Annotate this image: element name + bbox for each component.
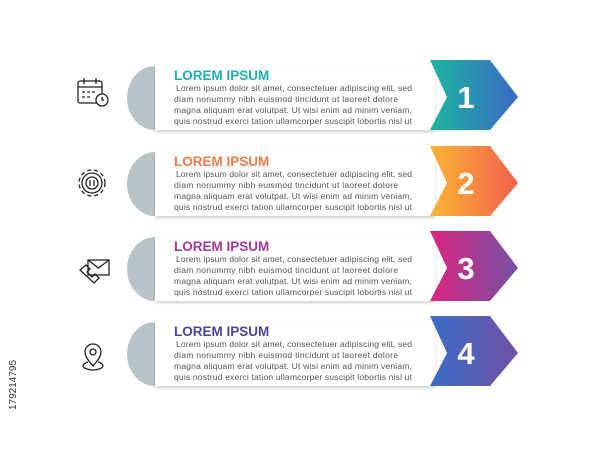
- number 2: 2: [457, 166, 475, 201]
- body 2: quis nostrud exerci tation ullamcorper suscipit lobortis nisl ut: [174, 202, 413, 212]
- body 4: diam nonummy nibh euismod tincidunt ut laoreet dolore: [174, 350, 398, 360]
- icon: location pin: [83, 344, 103, 370]
- row 1: [78, 60, 518, 130]
- body 1: diam nonummy nibh euismod tincidunt ut laoreet dolore: [174, 94, 398, 104]
- body 1: Lorem ipsum dolor sit amet, consectetuer adipiscing elit, sed: [176, 83, 412, 93]
- row 2: [79, 146, 518, 216]
- body 3: Lorem ipsum dolor sit amet, consectetuer adipiscing elit, sed: [176, 254, 412, 264]
- body 3: magna aliquam erat volutpat. Ut wisi enim ad minim veniam,: [174, 276, 412, 286]
- body 1: quis nostrud exerci tation ullamcorper suscipit lobortis nisl ut: [174, 116, 413, 126]
- number 4: 4: [457, 336, 475, 371]
- body 2: magna aliquam erat volutpat. Ut wisi enim ad minim veniam,: [174, 191, 412, 201]
- row 3: [80, 231, 518, 301]
- title 1: LOREM IPSUM: [174, 68, 269, 83]
- body 4: quis nostrud exerci tation ullamcorper suscipit lobortis nisl ut: [174, 372, 413, 382]
- icon: gear: [79, 170, 105, 196]
- half circle 3: [127, 237, 155, 301]
- row 4: [83, 316, 518, 386]
- arrow 4: [430, 316, 518, 386]
- body 3: quis nostrud exerci tation ullamcorper suscipit lobortis nisl ut: [174, 287, 413, 297]
- half circle 2: [127, 152, 155, 216]
- card 1: [155, 66, 435, 130]
- card 2: [155, 152, 435, 216]
- title 2: LOREM IPSUM: [174, 154, 269, 169]
- arrow 2: [430, 146, 518, 216]
- card 3: [155, 237, 435, 301]
- half circle 1: [127, 66, 155, 130]
- icon: calendar: [78, 78, 108, 106]
- watermark id: 179214795: [8, 360, 19, 410]
- body 2: Lorem ipsum dolor sit amet, consectetuer adipiscing elit, sed: [176, 169, 412, 179]
- body 4: Lorem ipsum dolor sit amet, consectetuer adipiscing elit, sed: [176, 339, 412, 349]
- body 3: diam nonummy nibh euismod tincidunt ut laoreet dolore: [174, 265, 398, 275]
- card 4: [155, 322, 435, 386]
- half circle 4: [127, 322, 155, 386]
- icon: envelope and phone: [80, 260, 109, 283]
- body 4: magna aliquam erat volutpat. Ut wisi enim ad minim veniam,: [174, 361, 412, 371]
- arrow 1: [430, 60, 518, 130]
- arrow 3: [430, 231, 518, 301]
- number 1: 1: [457, 80, 475, 115]
- body 1: magna aliquam erat volutpat. Ut wisi enim ad minim veniam,: [174, 105, 412, 115]
- number 3: 3: [457, 251, 475, 286]
- body 2: diam nonummy nibh euismod tincidunt ut laoreet dolore: [174, 180, 398, 190]
- title 4: LOREM IPSUM: [174, 324, 269, 339]
- title 3: LOREM IPSUM: [174, 239, 269, 254]
